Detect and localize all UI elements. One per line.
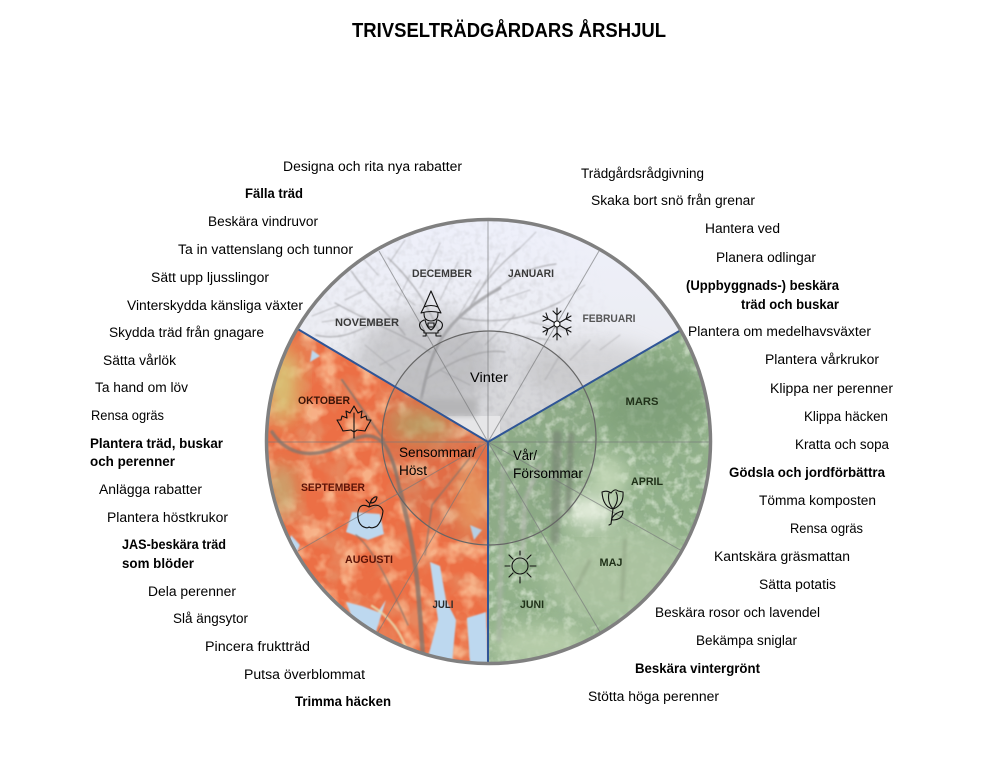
task: och perenner: [90, 454, 176, 469]
month labels: OKTOBER: [298, 395, 350, 407]
task: Stötta höga perenner: [588, 689, 720, 704]
icon: maple leaf: [337, 406, 371, 438]
text list: winter and spring tasks, right side: [581, 166, 894, 704]
task: som blöder: [122, 556, 195, 571]
task: Ta hand om löv: [95, 380, 188, 395]
season separators: [296, 328, 681, 663]
month labels: JUNI: [520, 599, 544, 611]
icon: rose: [602, 490, 623, 525]
task: Slå ängsytor: [173, 611, 248, 626]
task: Plantera om medelhavsväxter: [688, 324, 872, 339]
task: Sätta vårlök: [103, 353, 176, 368]
task: Rensa ogräs: [91, 408, 164, 423]
season labels: [399, 370, 583, 481]
title: TRIVSELTRÄDGÅRDARS ÅRSHJUL: [352, 18, 666, 42]
task: Klippa ner perenner: [770, 381, 894, 396]
season labels: Höst: [399, 463, 427, 478]
month labels: [298, 268, 663, 611]
task: Beskära vindruvor: [208, 214, 318, 229]
task: Plantera vårkrukor: [765, 352, 880, 367]
task: Klippa häcken: [804, 409, 888, 424]
task: Gödsla och jordförbättra: [729, 465, 885, 480]
task: Designa och rita nya rabatter: [283, 159, 463, 174]
task: Putsa överblommat: [244, 667, 365, 682]
task: Plantera höstkrukor: [107, 510, 229, 525]
month labels: SEPTEMBER: [301, 482, 365, 494]
task: (Uppbyggnads-) beskära: [686, 278, 839, 293]
task: Skaka bort snö från grenar: [591, 193, 756, 208]
task: Sätta potatis: [759, 577, 836, 592]
task: Beskära vintergrönt: [635, 661, 760, 676]
task: Kantskära gräsmattan: [714, 549, 850, 564]
task: Skydda träd från gnagare: [109, 325, 264, 340]
season labels: Vinter: [470, 370, 509, 385]
month labels: APRIL: [631, 476, 663, 488]
icon: sun: [505, 551, 536, 583]
icon: apple: [358, 497, 383, 528]
panel: autumn segment photo: [268, 330, 487, 662]
task: Tömma komposten: [759, 493, 876, 508]
wheel: [260, 215, 720, 670]
month labels: MAJ: [600, 557, 622, 569]
season labels: Sensommar/: [399, 445, 476, 460]
task: Trimma häcken: [295, 694, 391, 709]
task: Hantera ved: [705, 221, 780, 236]
season labels: Försommar: [513, 466, 583, 481]
month dividers: [267, 221, 711, 632]
task: Anlägga rabatter: [99, 482, 203, 497]
task: Beskära rosor och lavendel: [655, 605, 820, 620]
task: Rensa ogräs: [790, 521, 863, 536]
month labels: AUGUSTI: [345, 554, 393, 566]
task: Plantera träd, buskar: [90, 436, 224, 451]
outer ring: [266, 220, 710, 664]
month labels: JANUARI: [508, 268, 554, 280]
task: Fälla träd: [245, 186, 303, 201]
panel: spring segment photo: [489, 332, 709, 662]
task: JAS-beskära träd: [122, 537, 226, 552]
icon: snowflake: [543, 308, 571, 340]
task: Trädgårdsrådgivning: [581, 166, 704, 181]
month labels: NOVEMBER: [335, 317, 399, 329]
inner circle: seasons: [382, 331, 596, 545]
task: Planera odlingar: [716, 250, 817, 265]
task: Bekämpa sniglar: [696, 633, 797, 648]
task: Vinterskydda känsliga växter: [127, 298, 304, 313]
task: Kratta och sopa: [795, 437, 889, 452]
task: träd och buskar: [741, 297, 840, 312]
month labels: MARS: [626, 396, 658, 408]
month labels: FEBRUARI: [582, 313, 636, 325]
month labels: JULI: [432, 599, 454, 611]
task: Dela perenner: [148, 584, 237, 599]
task: Pincera fruktträd: [205, 639, 310, 654]
panel: winter segment photo: [300, 221, 678, 440]
month labels: DECEMBER: [412, 268, 472, 280]
season labels: Vår/: [513, 448, 537, 463]
task: Sätt upp ljusslingor: [151, 270, 270, 285]
icon: gnome: [420, 291, 442, 336]
text list: autumn and winter tasks, left side: [90, 159, 463, 709]
task: Ta in vattenslang och tunnor: [178, 242, 354, 257]
